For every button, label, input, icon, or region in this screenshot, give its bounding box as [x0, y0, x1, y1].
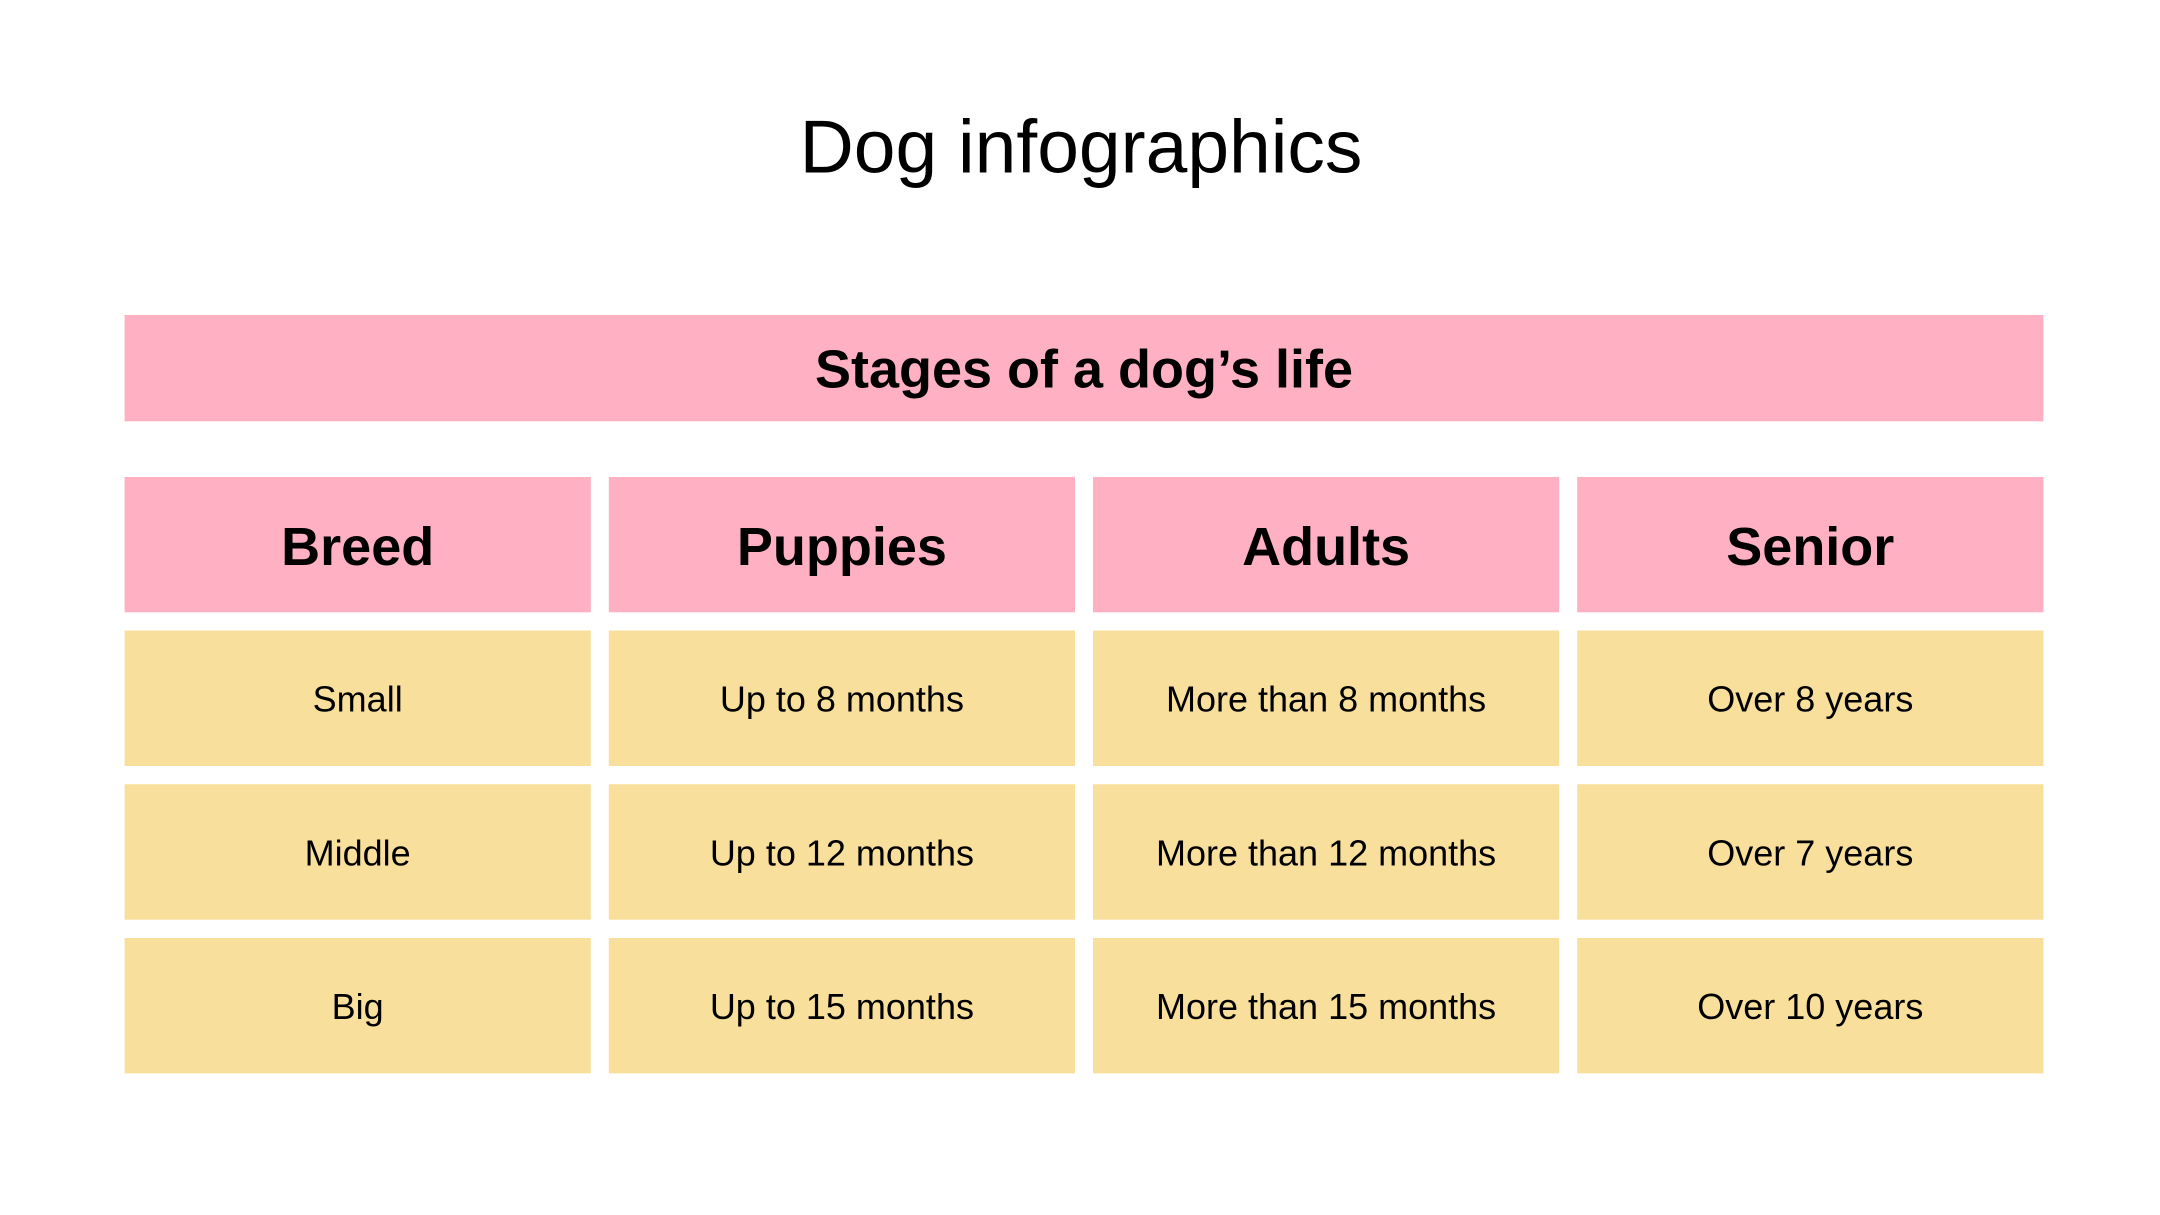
row: Middle: Over 7 years — [1707, 832, 1913, 873]
panel: banner heading: Stages of a dog’s life — [815, 340, 1353, 400]
column header: Breed — [125, 477, 591, 612]
column header: Senior: Senior — [1726, 517, 1894, 577]
column header: Breed: Breed — [281, 517, 434, 577]
row: Small — [125, 630, 2043, 766]
panel: table — [125, 477, 2043, 1073]
column header: Adults — [1093, 477, 1559, 612]
row: Big — [125, 938, 2043, 1073]
row: Big: Big — [332, 986, 384, 1027]
row: Middle — [125, 784, 2043, 920]
column header: Adults: Adults — [1242, 517, 1410, 577]
row: Big: More than 15 months — [1156, 986, 1496, 1027]
title: Dog infographics — [800, 104, 1362, 188]
row: Small: Up to 8 months — [720, 679, 964, 720]
column header: Senior — [1577, 477, 2043, 612]
row: Small: More than 8 months — [1166, 679, 1486, 720]
row: Small: Over 8 years — [1707, 679, 1913, 720]
row: Big: Over 10 years — [1697, 986, 1923, 1027]
row: Middle: More than 12 months — [1156, 832, 1496, 873]
row: Middle: Up to 12 months — [710, 832, 974, 873]
row: Big: Up to 15 months — [710, 986, 974, 1027]
row: Middle: Middle — [305, 832, 411, 873]
column header: Puppies: Puppies — [737, 517, 947, 577]
row: Small: Small — [313, 679, 403, 720]
panel: banner heading — [125, 315, 2043, 421]
column header: Puppies — [609, 477, 1075, 612]
